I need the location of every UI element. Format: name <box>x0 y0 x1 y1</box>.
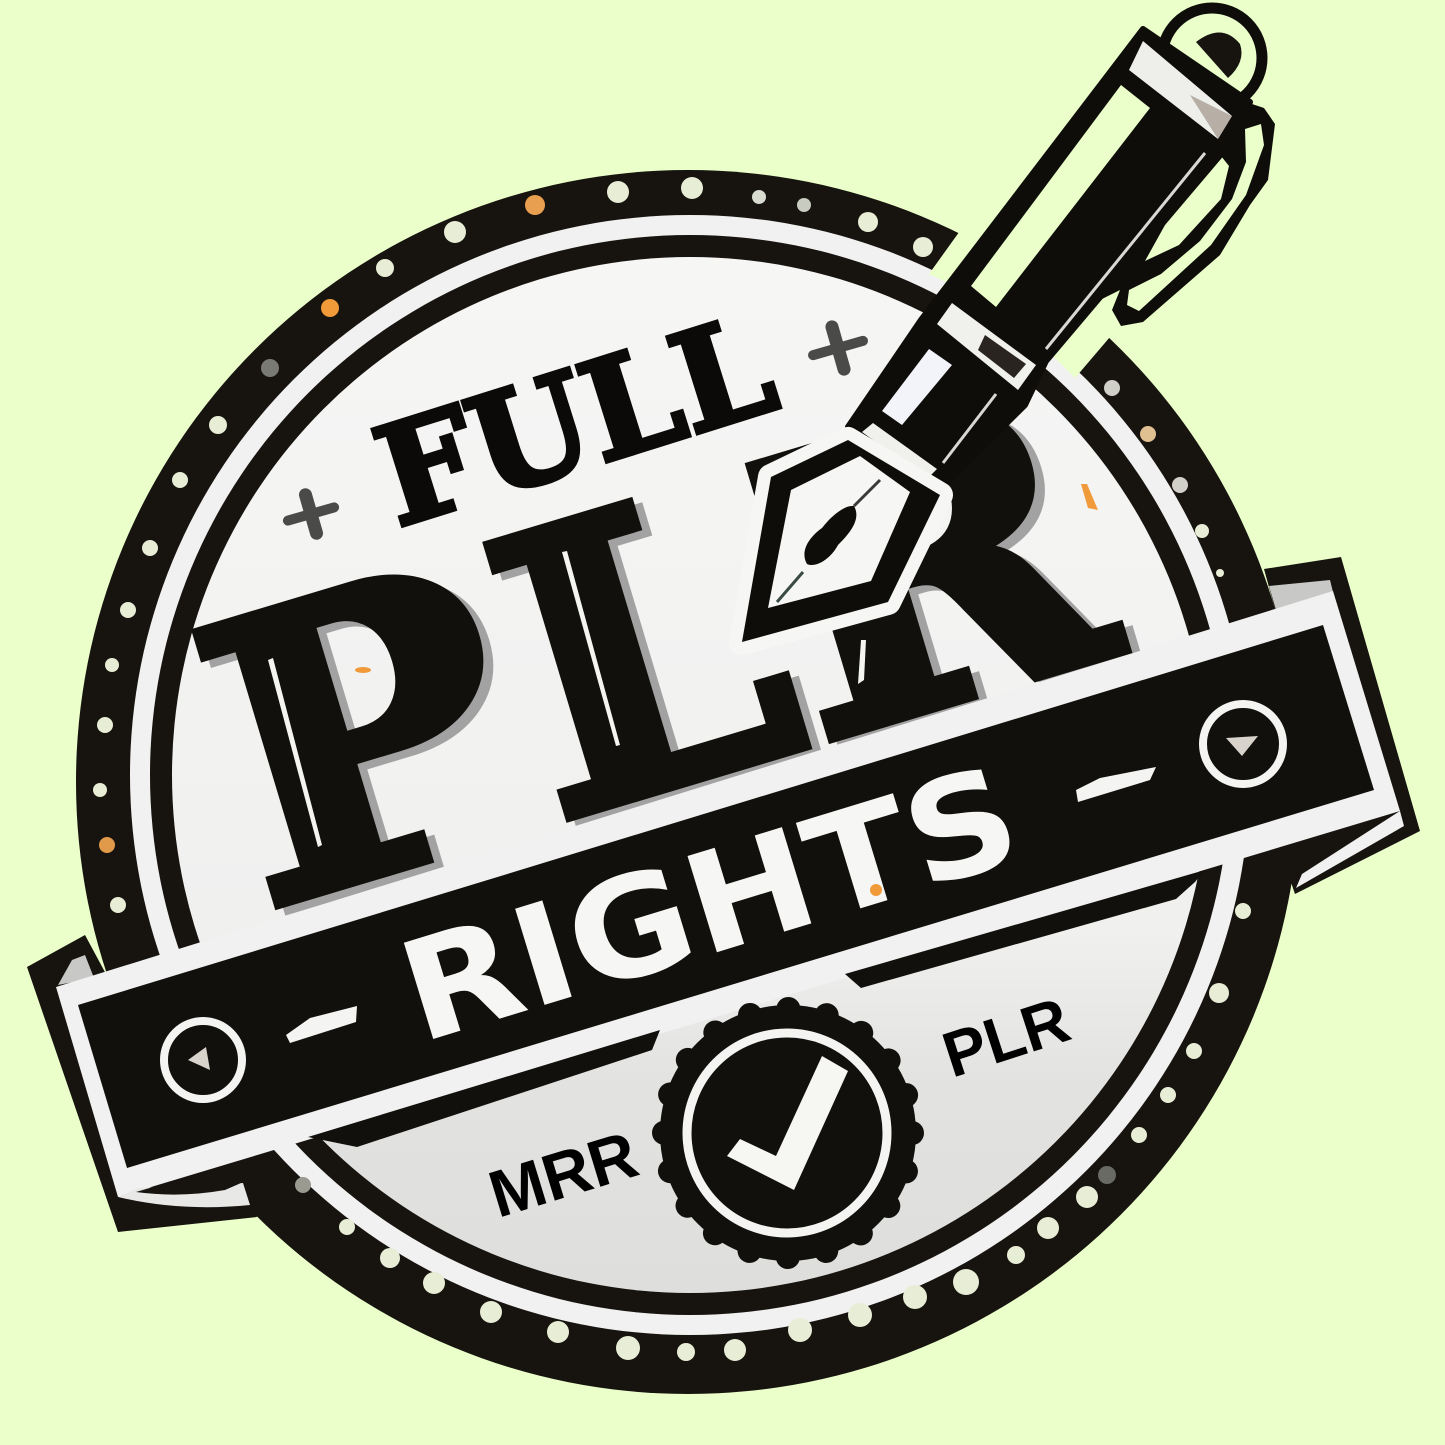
label: MRR: MRR <box>480 1117 646 1231</box>
pen section highlight <box>882 349 952 425</box>
letter core: PLR <box>158 303 1154 996</box>
orange specks <box>355 484 1098 673</box>
heading: FULL: FULL <box>359 284 792 558</box>
orange speck on T <box>870 884 882 896</box>
heading: RIGHTS: RIGHTS <box>383 735 1037 1075</box>
icon: right sparkle <box>807 320 869 376</box>
ribbon: left tail <box>27 935 257 1232</box>
black strip under ribbon: right <box>845 870 1205 988</box>
black strip under ribbon: left <box>308 1030 660 1147</box>
dotted border <box>93 177 1251 1361</box>
letter highlights <box>268 551 866 847</box>
label: PLR: PLR <box>934 983 1078 1091</box>
ribbon: banner <box>56 580 1404 1207</box>
icon: fountain pen <box>742 8 1275 642</box>
pen collar <box>937 303 1036 390</box>
pen band <box>862 423 937 479</box>
icon: check seal <box>660 1005 916 1261</box>
ribbon ornament: right ring <box>1203 704 1283 784</box>
pen top ball <box>1196 32 1242 78</box>
pen barrel highlight <box>1046 153 1205 349</box>
pen nib <box>742 440 940 642</box>
letter shadows: PLR <box>168 308 1164 1001</box>
heading: PLR <box>158 300 1164 1004</box>
pen body <box>848 29 1250 490</box>
ribbon ornament: right dash <box>1076 767 1156 802</box>
icon: left sparkle <box>282 488 340 540</box>
panel: circular badge <box>76 170 1300 1394</box>
pen top ring <box>1162 8 1262 108</box>
ribbon: right tail <box>1264 557 1420 894</box>
pen barrel window <box>971 85 1150 307</box>
ribbon ornament: left dash <box>286 1006 357 1043</box>
pen clip <box>1100 100 1275 326</box>
ribbon ornament: left ring <box>164 1021 242 1099</box>
pen cap band <box>1129 41 1232 139</box>
